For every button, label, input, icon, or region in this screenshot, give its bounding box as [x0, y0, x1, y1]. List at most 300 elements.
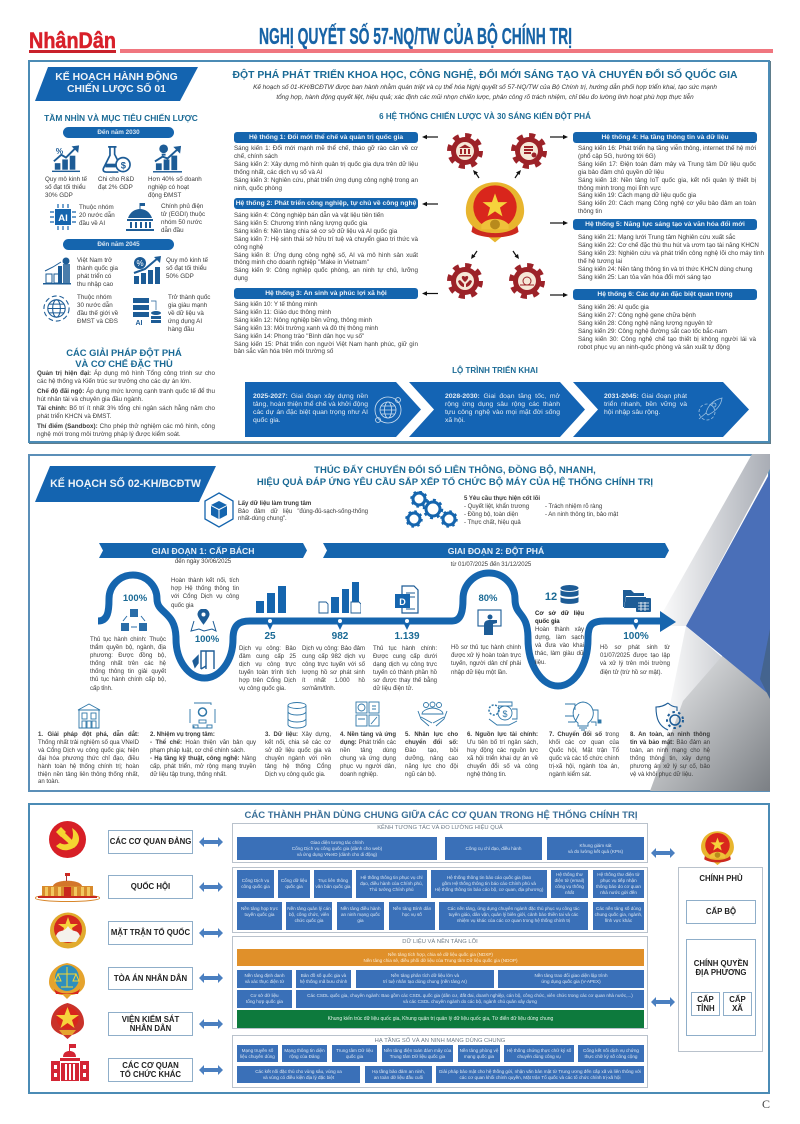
text: 80% dossiers: Hồ sơ thủ tục hành chính được xử lý hoàn toàn trực tuyến, người dân chỉ phải nhập dữ liệu một lần.	[451, 645, 521, 676]
heading: digital transformation: HIỆU QUẢ ĐÁP ỨNG YÊU CẦU SẮP XẾP TỔ CHỨC BỘ MÁY CỦA HỆ THỐNG CHÍNH TRỊ	[257, 477, 653, 488]
text: data and AI power: hàng đầu	[168, 326, 194, 333]
text: initiatives 4-9: Sáng kiến 4: Công nghiệp bán dẫn và vật liệu tiên tiến	[234, 212, 384, 219]
text: key tasks: 2. Nhiệm vụ trọng tâm:	[150, 732, 215, 738]
icon: data stack	[287, 702, 307, 729]
icon: globe network	[43, 295, 70, 322]
text: digital economy 30%: số đạt tối thiểu	[45, 184, 86, 191]
cell: data architecture: Khung kiến trúc dữ liệu quốc gia, Khung quản trị quản lý dữ liệu quốc gia, Từ điển dữ liệu dùng chung	[328, 1016, 553, 1022]
text: connect to portal: Hoàn thành kết nối, tích hợp Hệ thống thông tin với Cổng Dịch vụ công quốc gia	[171, 578, 239, 609]
cell: main interface: Giao diện tương tác chính	[310, 840, 364, 844]
cell: KPIs: Khung giám sát	[580, 842, 611, 848]
box: interaction channels	[232, 823, 648, 863]
text: phase 2025-2027: 2025-2027: Giai đoạn xây dựng nền tảng, hoàn thiện thể chế và khởi động các dự án đặc biệt quan trọng như AI quốc gia.	[253, 393, 368, 424]
diagram: national emblem with gears and arrows	[422, 133, 568, 299]
org: commune level	[723, 992, 752, 1016]
cell: general database: Cơ sở dữ liệu	[250, 993, 279, 998]
text: R&D 2%: Chi cho R&D	[98, 176, 134, 183]
cell: general database: tổng hợp quốc gia	[246, 999, 283, 1004]
pill: by 2030	[63, 127, 174, 138]
icon: AI chip	[50, 204, 76, 230]
text: 50% GDP: 50% GDP	[166, 273, 194, 280]
text: high income	[77, 257, 118, 288]
icon: government emblem	[700, 830, 735, 866]
cell: main interface: Cổng Dịch vụ công quốc gia (dành cho web)	[292, 846, 382, 850]
panel: shared components	[28, 803, 770, 1094]
cell: digital literacy	[389, 902, 435, 930]
icon: finance hand	[487, 701, 518, 730]
text: sandbox: Thí điểm (Sandbox): Cho phép thử nghiệm các mô hình, công nghệ mới trong môi trường pháp lý được kiểm soát.	[37, 423, 215, 438]
stat: 100% admin procedures: 100%	[123, 593, 147, 604]
stat: 80%: 80%	[478, 593, 498, 604]
icon: gear culture	[512, 266, 542, 296]
icon: org process gear	[188, 701, 217, 732]
cell: data architecture	[237, 1010, 644, 1028]
org: province level: TỈNH	[696, 1004, 715, 1013]
cell: data portal: Cổng dữ liệu quốc gia	[281, 878, 307, 889]
cell: document axis: Trục liên thông văn bản quốc gia	[316, 878, 350, 889]
chevron: 2031-2045	[573, 382, 749, 437]
text: breakthrough solutions: 1. Giải pháp đột phá, dẫn dắt: Thống nhất trải nghiệm số qua VNeID và Cổng Dịch vụ công quốc gia; hiện đại hóa phương thức chỉ đạo, điều hành toàn hệ thống chính trị; hoàn thiện nền tảng liên thông thống nhất, an toàn.	[38, 732, 139, 785]
dots: timeline markers	[268, 619, 638, 623]
org: people's court	[108, 967, 193, 990]
cell: digital signature: Hệ thống chứng thực chữ ký số chuyên dùng công vụ	[507, 1048, 571, 1058]
text: 5 core requirements: 5 Yêu cầu thực hiện cốt lõi	[464, 496, 540, 502]
corner mark: C	[762, 1097, 770, 1111]
heading: digital transformation	[257, 464, 653, 488]
bar: system 4	[573, 132, 757, 143]
text: plan summary	[253, 83, 717, 100]
icon: flask and dollar	[102, 146, 131, 173]
text: initiatives 4-9: Sáng kiến 6: Nền tảng chia sẻ cơ sở dữ liệu và AI quốc gia	[234, 228, 397, 235]
text: initiatives 21-25: Sáng kiến 24: Nền tảng thông tin và tri thức KHCN dùng chung	[578, 266, 752, 273]
icon: people's procuracy	[51, 1003, 84, 1039]
text: top 30: đầu thế giới về	[77, 310, 118, 317]
bar: system 3: Hệ thống 3: An sinh và phúc lợi xã hội	[265, 290, 387, 297]
label: digital infrastructure: HẠ TẦNG SỐ VÀ AN NINH MẠNG DÙNG CHUNG	[375, 1038, 505, 1044]
icon: database	[560, 585, 579, 608]
text: 50% GDP: số đạt tối thiểu	[166, 265, 207, 272]
icon: AI chip: AI	[58, 213, 68, 224]
text: high income: thu nhập cao	[77, 281, 113, 288]
cell: data center: Trung tâm Dữ liệu quốc gia	[336, 1048, 373, 1058]
road: timeline path with arrow	[90, 564, 690, 694]
cell: other shared platforms: Các nền tảng số dùng chung quốc gia, ngành, lĩnh vực khác	[595, 906, 642, 923]
chevron: 2025-2027	[245, 382, 421, 437]
cell: government direction system	[356, 870, 427, 898]
cell: document axis	[314, 870, 352, 898]
text: initiatives 10-15: Sáng kiến 13: Môi trường xanh và đô thị thông minh	[234, 325, 378, 332]
chart: bars and documents 982	[318, 578, 361, 614]
cell: reporting system: Hệ thống thông tin báo cáo bộ, cơ quan, địa phương)	[435, 887, 543, 892]
arrow: procuracy	[199, 1019, 223, 1029]
cell: sector platforms: Các nền tảng, ứng dụng chuyên ngành đặc thù phục vụ công tác tuyên giáo, dân vận, quản lý biên giới, cảnh báo thiên tai và các nhiệm vụ khác của các cơ quan trong hệ thống chính trị	[447, 906, 580, 923]
cell: general database	[237, 990, 292, 1008]
cell: cloud: Nền tảng điện toán đám mây của Trung tâm Dữ liệu quốc gia	[384, 1048, 451, 1058]
heading: shared components: CÁC THÀNH PHẦN DÙNG CHUNG GIỮA CÁC CƠ QUAN TRONG HỆ THỐNG CHÍNH TRỊ	[244, 810, 637, 821]
banner: Kế hoạch hành động chiến lược số 01: CHIẾN LƯỢC SỐ 01	[67, 84, 166, 95]
org: local government: ĐỊA PHƯƠNG	[696, 968, 746, 977]
icon: growth bars	[134, 256, 161, 284]
icon: user at board	[477, 609, 502, 635]
text: initiatives 10-15: Sáng kiến 15: Phát triển con người Việt Nam hạnh phúc, giữ gìn bản sắc văn hóa trên môi trường số	[234, 341, 418, 355]
icon: growth chart percent: %	[56, 146, 64, 156]
org: ministry level: CẤP BỘ	[706, 907, 736, 916]
chevron: 2028-2030	[409, 382, 585, 437]
pill: by 2045: Đến năm 2045	[97, 241, 140, 248]
icon: gear governance	[450, 136, 480, 166]
cell: other shared platforms	[593, 902, 644, 930]
text: phase 2031-2045: 2031-2045: Giai đoạn phát triển nhanh, bền vững và hội nhập sâu rộng.	[604, 393, 687, 416]
banner: phase 1: GIAI ĐOẠN 1: CẤP BÁCH	[152, 546, 254, 556]
cell: main interface	[237, 837, 437, 860]
text: top 20 AI	[79, 204, 115, 227]
text: initiatives 21-25: Sáng kiến 25: Lan tỏa văn hóa đổi mới sáng tạo	[578, 274, 711, 281]
cell: digital map: hệ thống mã bưu chính	[300, 979, 347, 984]
cell: online meetings: Nền tảng họp trực tuyến quốc gia	[241, 906, 278, 917]
text: data and AI power: Trở thành quốc	[168, 294, 210, 301]
text: R&D 2%: đạt 2% GDP	[98, 184, 133, 191]
cell: digital literacy: Nền tảng Bình dân học vụ số	[393, 906, 431, 917]
heading: breakthrough solutions: VÀ CƠ CHẾ ĐẶC THÙ	[75, 358, 173, 368]
org: province level: CẤP	[697, 995, 714, 1004]
arrow: court	[199, 973, 223, 983]
text: initiatives 16-20: Sáng kiến 17: Điện toán đám mây và Trung tâm Dữ liệu quốc gia bảo đảm chủ quyền dữ liệu	[578, 161, 756, 176]
cell: online meetings	[237, 902, 282, 930]
text: 12 national databases	[535, 610, 584, 667]
text: top 20 AI: 20 nước dẫn	[79, 212, 115, 219]
org: national assembly	[108, 875, 193, 899]
icon: people's court	[49, 963, 85, 999]
cell: identity: Nền tảng định danh	[244, 973, 285, 978]
icon: growth chart percent	[52, 145, 80, 172]
heading: breakthrough development: ĐỘT PHÁ PHÁT TRIỂN KHOA HỌC, CÔNG NGHỆ, ĐỔI MỚI SÁNG TẠO VÀ CHUYỂN ĐỔI SỐ QUỐC GIA	[233, 70, 737, 81]
org: people's court: TÒA ÁN NHÂN DÂN	[114, 974, 187, 983]
cell: national databases	[296, 990, 644, 1008]
text: admin procedures: Thủ tục hành chính: Thuộc thẩm quyền bộ, ngành, địa phương: Được đồng bộ, thống nhất trên các hệ thống thông tin giải quyết thủ tục hành chính cấp bộ, cấp tỉnh.	[90, 637, 166, 692]
cell: public signature gateway: Cổng kết nối dịch vụ chứng thực chữ ký số công cộng	[583, 1048, 639, 1058]
cell: sector platforms	[439, 902, 588, 930]
cell: digital map	[296, 970, 351, 988]
cell: email notices: Hệ thống thư điện tử phục vụ tiếp nhận thông báo do cơ quan nhà nước gửi đến	[596, 872, 641, 895]
cell: KPIs	[547, 837, 644, 860]
text: top 30	[77, 294, 118, 325]
box: government	[678, 867, 763, 1052]
text: 5 core requirements: - Thực chất, hiệu quả	[464, 520, 521, 526]
org: party agencies: CÁC CƠ QUAN ĐẢNG	[110, 837, 191, 846]
text: 982 services: Dịch vụ công: Bảo đảm cung cấp 982 dịch vụ công trực tuyến với số lượng hồ sơ phát sinh ít nhất 1.000 hồ sơ/năm/tỉnh.	[302, 646, 365, 692]
text: data and AI power: gia giàu mạnh	[168, 302, 207, 309]
chart: bars 25	[256, 585, 287, 614]
cell: NDXP NDOP	[237, 949, 644, 966]
org: party agencies	[108, 830, 193, 854]
text: initiatives 16-20: Sáng kiến 19: Cách mạng dữ liệu quốc gia	[578, 192, 696, 199]
arrow: party	[199, 837, 223, 847]
bar: system 1: Hệ thống 1: Đổi mới thể chế và quản trị quốc gia	[249, 134, 403, 141]
org: fatherland front	[108, 921, 193, 945]
arrow: national assembly	[199, 882, 223, 892]
text: platforms and apps: 4. Nền tảng và ứng dụng: Phát triển các nền tảng dùng chung và ứng dụng phục vụ người dân, doanh nghiệp.	[340, 732, 396, 778]
text: initiatives 10-15	[234, 301, 418, 355]
text: key tasks: - Hạ tầng kỹ thuật, công nghệ: Nâng cấp, phát triển, mở rộng mạng truyền dữ liệu tập trung, thống nhất.	[150, 756, 256, 778]
icon: door	[192, 650, 215, 670]
icon: documents: D	[399, 597, 406, 607]
text: top 20 AI: Thuộc nhóm	[79, 204, 114, 211]
arrow: government top	[651, 848, 675, 858]
icon: folder and calendar	[622, 586, 651, 613]
icon: solution building	[76, 702, 102, 729]
banner: Kế hoạch hành động chiến lược số 01	[35, 67, 198, 101]
text: data and AI power: về dữ liệu và	[168, 310, 204, 317]
cell: cyber ops	[337, 902, 384, 930]
date: phase 2: từ 01/07/2025 đến 31/12/2025	[451, 562, 531, 568]
cell: V-APEX: Nền tảng trao đổi giao diện lập trình	[534, 973, 608, 978]
icon: government building	[126, 203, 154, 231]
org: ministry level	[686, 900, 756, 924]
cell: identity	[237, 970, 292, 988]
org: other agencies	[108, 1058, 193, 1082]
cell: public signature gateway	[578, 1045, 644, 1062]
org: local government	[686, 939, 756, 1036]
arrow: fatherland front	[199, 928, 223, 938]
text: initiatives 4-9: Sáng kiến 9: Công nghiệp quốc phòng, an ninh tự chủ, lưỡng dụng	[234, 267, 418, 282]
cell: personnel: Nền tảng quản lý cán bộ, công chức, viên chức quốc gia	[287, 906, 331, 923]
icon: documents	[395, 585, 419, 614]
text: EGDI top 50	[161, 203, 205, 234]
text: initiatives 16-20: Sáng kiến 20: Cách mạng Công nghệ cơ yếu bảo đảm an toàn thông tin	[578, 200, 756, 215]
text: initiatives 21-25	[578, 233, 764, 281]
stat: 25: 25	[264, 631, 276, 642]
cell: party network	[282, 1045, 327, 1062]
bar: system 2: Hệ thống 2: Phát triển công nghiệp, tự chủ về công nghệ	[236, 200, 416, 207]
text: plan summary: Kế hoạch số 01-KH/BCĐTW được ban hành nhằm quán triệt và cụ thể hóa Nghị quyết số 57-NQ/TW của Bộ Chính trị, hướng dẫn phối hợp triển khai, tạo sức mạnh	[253, 84, 717, 91]
org: people's procuracy: VIỆN KIỂM SÁT	[122, 1015, 179, 1024]
cell: cyber defence: Nền tảng phòng vệ mạng quốc gia	[460, 1048, 498, 1058]
heading: digital transformation: THÚC ĐẨY CHUYỂN ĐỔI SỐ LIÊN THÔNG, ĐỒNG BỘ, NHANH,	[314, 465, 596, 476]
cell: cloud	[382, 1045, 453, 1062]
icon: growth bars: %	[136, 259, 144, 268]
org: other agencies: TỔ CHỨC KHÁC	[120, 1070, 181, 1079]
text: initiatives 1-3: Sáng kiến 3: Nghiên cứu, phát triển ứng dụng công nghệ trong an ninh, quốc phòng	[234, 177, 418, 192]
icon: map pin	[190, 609, 217, 632]
bar: system 1	[234, 132, 418, 143]
icon: national assembly	[35, 872, 100, 902]
text: 12 national databases: Cơ sở dữ liệu quốc gia	[535, 611, 584, 625]
heading: roadmap: LỘ TRÌNH TRIỂN KHAI	[452, 366, 538, 375]
text: digital transformation in organs: 7. Chuyển đổi số trong khối các cơ quan của Quốc hội, Mặt trận Tổ quốc và các tổ chức chính trị-xã hội, ngành tòa án, ngành kiểm sát.	[549, 732, 619, 778]
text: initiatives 16-20	[578, 144, 756, 215]
cell: dedicated network: Mạng truyền số liệu chuyên dùng	[240, 1048, 275, 1058]
text: key tasks	[150, 732, 256, 779]
org: other agencies: CÁC CƠ QUAN	[122, 1061, 179, 1070]
text: initiatives 10-15: Sáng kiến 11: Giáo dục thông minh	[234, 309, 331, 316]
text: initiatives 21-25: Sáng kiến 21: Mạng lưới Trung tâm Nghiên cứu xuất sắc	[578, 234, 735, 241]
icon: data cube	[204, 492, 234, 528]
banner: Kế hoạch hành động chiến lược số 01: KẾ HOẠCH HÀNH ĐỘNG	[55, 72, 178, 82]
icon: gears	[405, 491, 458, 529]
arrow: government bottom	[651, 997, 675, 1007]
text: modern governance: Quản trị hiện đại: Áp dụng mô hình Tổng công trình sư cho các hệ thống và Kiến trúc sư trưởng cho các dự án lớn.	[37, 370, 215, 385]
box: digital infrastructure	[232, 1035, 648, 1088]
cell: secure documents: Giải pháp bảo mật cho hệ thống gửi, nhận văn bản mật từ Trung ương đến cấp xã và liên thông với các cơ quan khối chính quyền, Mặt trận Tổ quốc và các tổ chức chính trị-xã hội	[439, 1068, 641, 1080]
cell: endpoint security: an toàn dữ liệu đầu cuối	[374, 1074, 423, 1080]
text: initiatives 1-3: Sáng kiến 2: Xây dựng mô hình quản trị quốc gia dựa trên dữ liệu thống nhất, các dịch vụ số và AI	[234, 161, 418, 176]
stat: 12: 12	[545, 591, 557, 603]
text: data: 3. Dữ liệu: Xây dựng, kết nối, chia sẻ các cơ sở dữ liệu quốc gia và chuyên ngành với nền tảng hệ thống Cổng Dịch vụ công quốc gia.	[265, 732, 331, 778]
icon: flask and dollar: $	[121, 160, 127, 170]
text: requirements column 2	[545, 503, 625, 519]
text: initiatives 1-3	[234, 144, 418, 192]
icon: lightbulb circuit	[565, 700, 602, 731]
org: national assembly: QUỐC HỘI	[131, 882, 170, 891]
cell: party network: Mạng thông tin diện rộng của Đảng	[284, 1048, 325, 1058]
text: enterprises 40%	[148, 176, 202, 199]
cell: NDXP NDOP: Nền tảng tích hợp, chia sẻ dữ liệu quốc gia (NDXP)	[388, 952, 493, 956]
text: human resources: 5. Nhân lực cho chuyển đổi số: Đào tạo, bồi dưỡng, nâng cao năng lực cho đội ngũ cán bộ.	[405, 732, 458, 778]
org: local government: CHÍNH QUYỀN	[694, 959, 748, 968]
text: initiatives 21-25: Sáng kiến 23: Nghiên cứu và phát triển công nghệ lõi cho máy tính thế hệ tương lai	[578, 250, 764, 265]
arrows: systems pointers	[422, 135, 568, 297]
label: data and core platforms: DỮ LIỆU VÀ NỀN TẢNG LÕI	[402, 939, 478, 945]
text: security: 8. An toàn, an ninh thông tin và bảo mật: Bảo đảm an toàn, an ninh mạng cho hệ thống thông tin, xây dựng phương án xử lý sự cố, bảo vệ và khôi phục dữ liệu.	[630, 732, 710, 778]
cell: NDXP NDOP: Nền tảng chia sẻ, điều phối dữ liệu của Trung tâm Dữ liệu quốc gia (NDOP)	[364, 958, 518, 962]
cell: KPIs: và đo lường kết quả (KPIs)	[568, 848, 623, 854]
text: phase 2028-2030: 2028-2030: Giai đoạn tăng tốc, mở rộng ứng dụng sâu rộng các thành tựu công nghệ vào mọi mặt đời sống xã hội.	[445, 393, 560, 424]
banner: phase 2: GIAI ĐOẠN 2: ĐỘT PHÁ	[448, 546, 544, 556]
text: initiatives 26-30	[578, 304, 756, 351]
cell: digital map: Bản đồ số quốc gia và	[301, 973, 346, 978]
cell: direction tools	[445, 837, 542, 860]
text: EGDI top 50: Chính phủ điện	[161, 203, 203, 210]
cell: cyber defence	[458, 1045, 500, 1062]
text: initiatives 4-9	[234, 211, 418, 282]
icon: other organizations	[51, 1043, 89, 1081]
text: initiatives 10-15: Sáng kiến 12: Nông nghiệp bền vững, thông minh	[234, 317, 372, 324]
icon: globe circuit	[374, 396, 402, 424]
icon: shield gear	[655, 701, 685, 731]
bar: system 6: Hệ thống 6: Các dự án đặc biệt quan trọng	[597, 291, 733, 298]
text: initiatives 10-15: Sáng kiến 10: Y tế thông minh	[234, 301, 318, 308]
cell: remote connections	[237, 1066, 360, 1083]
cell: endpoint security	[365, 1066, 432, 1083]
box: data and core platforms	[232, 936, 648, 1029]
text: 5 core requirements	[464, 495, 542, 527]
text: 5 core requirements: - Quyết liệt, khẩn trương	[464, 504, 529, 510]
text: top 30: ĐMST và CĐS	[77, 318, 118, 325]
text: 50% GDP: Quy mô kinh tế	[166, 257, 208, 264]
bar: system 3	[234, 288, 418, 299]
text: initiatives 26-30: Sáng kiến 27: Công nghệ gene chữa bệnh	[578, 312, 696, 319]
bar: system 2	[234, 198, 418, 209]
date: phase 1: đến ngày 30/06/2025	[175, 559, 231, 565]
pill: by 2030: Đến năm 2030	[97, 129, 140, 136]
banner: phase 1	[99, 543, 307, 558]
cell: remote connections: và vùng có điều kiện địa lý đặc biệt	[263, 1074, 334, 1080]
icon: AI data server	[133, 298, 161, 326]
text: initiatives 26-30: Sáng kiến 29: Công nghệ đường sắt cao tốc bắc-nam	[578, 328, 727, 335]
cell: big data AI: trí tuệ nhân tạo dùng chung (nền tảng AI)	[383, 979, 467, 984]
label: interaction channels: KÊNH TƯƠNG TÁC VÀ ĐO LƯỜNG HIỆU QUẢ	[377, 825, 503, 831]
text: initiatives 10-15: Sáng kiến 14: Phong trào "Bình dân học vụ số"	[234, 333, 364, 340]
text: high income: Việt Nam trở	[77, 257, 112, 264]
text: EGDI top 50: nhóm 50 nước	[161, 219, 202, 226]
icon: national emblem	[466, 182, 524, 242]
cell: identity: và xác thực điện tử	[245, 979, 284, 984]
panel: plan 02	[28, 454, 770, 792]
text: digital economy 30%: 30% GDP	[45, 192, 73, 199]
cell: remote connections: Các kết nối đặc thù cho vùng sâu, vùng xa	[255, 1068, 342, 1074]
org: province level	[691, 992, 720, 1016]
cell: public service portal: Cổng Dịch vụ công quốc gia	[241, 878, 270, 889]
label: government: CHÍNH PHỦ	[699, 874, 743, 883]
text: digital economy 30%	[45, 176, 87, 199]
cell: reporting system: Hệ thống thông tin báo cáo quốc gia (bao	[447, 875, 531, 880]
text: initiatives 1-3: Sáng kiến 1: Đổi mới mạnh mẽ thể chế, tháo gỡ rào cản về cơ chế, chính sách	[234, 145, 418, 160]
icon: gear data infrastructure	[514, 136, 544, 166]
stat: 982: 982	[332, 631, 348, 642]
cell: direction tools: Công cụ chỉ đạo, điều hành	[466, 846, 521, 850]
bar: system 5	[573, 219, 757, 230]
cell: endpoint security: Hạ tầng bảo đảm an ninh,	[372, 1068, 425, 1074]
cell: personnel	[286, 902, 332, 930]
text: initiatives 16-20: Sáng kiến 18: Nền tảng IoT quốc gia, kết nối quản lý thiết bị thông minh trong mọi lĩnh vực	[578, 177, 756, 192]
cell: email	[551, 870, 588, 898]
panel: action plan 01	[28, 60, 770, 443]
cell: big data AI	[356, 970, 494, 988]
org: people's procuracy: NHÂN DÂN	[130, 1024, 171, 1033]
heading: breakthrough solutions	[66, 347, 182, 368]
heading: 6 systems: 6 HỆ THỐNG CHIẾN LƯỢC VÀ 30 SÁNG KIẾN ĐỘT PHÁ	[379, 112, 591, 121]
cell: data center	[332, 1045, 377, 1062]
cell: national databases: Các CSDL quốc gia, chuyên ngành: Bao gồm các CSDL quốc gia (dân cư, đất đai, doanh nghiệp, cán bộ, công chức, viên chức trong các cơ quan nhà nước,...)	[307, 993, 633, 998]
text: initiatives 4-9: Sáng kiến 5: Chương trình năng lượng quốc gia	[234, 220, 367, 227]
text: key tasks: - Thể chế: Hoàn thiện văn bản quy phạm pháp luật, cơ chế chính sách.	[150, 740, 256, 754]
text: enterprises 40%: nghiệp có hoạt	[148, 184, 189, 191]
banner: plan no. 02: KẾ HOẠCH SỐ 02-KH/BCĐTW	[50, 478, 201, 490]
stat: 100% electronic: 100%	[623, 631, 649, 642]
org: fatherland front: MẶT TRẬN TỔ QUỐC	[111, 928, 190, 937]
text: initiatives 26-30: Sáng kiến 28: Công nghệ năng lượng nguyên tử	[578, 320, 712, 327]
icon: party emblem	[49, 821, 86, 858]
icon: rocket gear	[698, 398, 722, 420]
cell: secure documents	[436, 1066, 644, 1083]
icon: coins and buildings	[43, 258, 71, 284]
cell: V-APEX	[498, 970, 644, 988]
stat: 1.139: 1.139	[394, 631, 420, 642]
heading: vision and goals: TẦM NHÌN VÀ MỤC TIÊU CHIẾN LƯỢC	[44, 113, 198, 123]
pill: by 2045	[63, 239, 174, 250]
text: high income: phát triển có	[77, 273, 111, 280]
text: initiatives 26-30: Sáng kiến 26: AI quốc gia	[578, 304, 649, 311]
text: 50% GDP	[166, 257, 208, 280]
bar: system 6	[573, 289, 757, 300]
text: top 30: Thuộc nhóm	[77, 294, 112, 301]
text: requirements column 2: - An ninh thông tin, bảo mật	[545, 512, 618, 518]
cell: public service portal	[237, 870, 274, 898]
cell: digital signature	[504, 1045, 574, 1062]
text: digital economy 30%: Quy mô kinh tế	[45, 176, 87, 183]
cell: cyber ops: Nền tảng điều hành an ninh mạng quốc gia	[340, 906, 381, 923]
text: top 30: 30 nước dẫn	[77, 302, 113, 309]
header rule	[120, 49, 773, 53]
text: data as the center: Bảo đảm dữ liệu "đúng-đủ-sạch-sống-thống nhất-dùng chung".	[238, 509, 368, 522]
cell: government direction system: Hệ thống thông tin phục vụ chỉ đạo, điều hành của Chính phủ, Thủ tướng Chính phủ	[360, 875, 423, 892]
arrow: other agencies	[199, 1065, 223, 1075]
box: shared systems	[232, 867, 648, 933]
text: finance: Tài chính: Bố trí ít nhất 3% tổng chi ngân sách hằng năm cho phát triển KHCN và ĐMST.	[37, 405, 215, 420]
text: plan summary: tổng hợp, hành động quyết liệt, hiệu quả; xác định các mũi nhọn chiến lược, phân công rõ trách nhiệm, chỉ tiêu đo lường linh hoạt phù hợp thực tiễn	[276, 94, 694, 100]
text: 1.139 procedures: Thủ tục hành chính: Được cung cấp dưới dạng dịch vụ công trực tuyến có thành phần hồ sơ được thay thế bằng dữ liệu điện tử.	[373, 646, 437, 692]
cell: reporting system	[431, 870, 547, 898]
